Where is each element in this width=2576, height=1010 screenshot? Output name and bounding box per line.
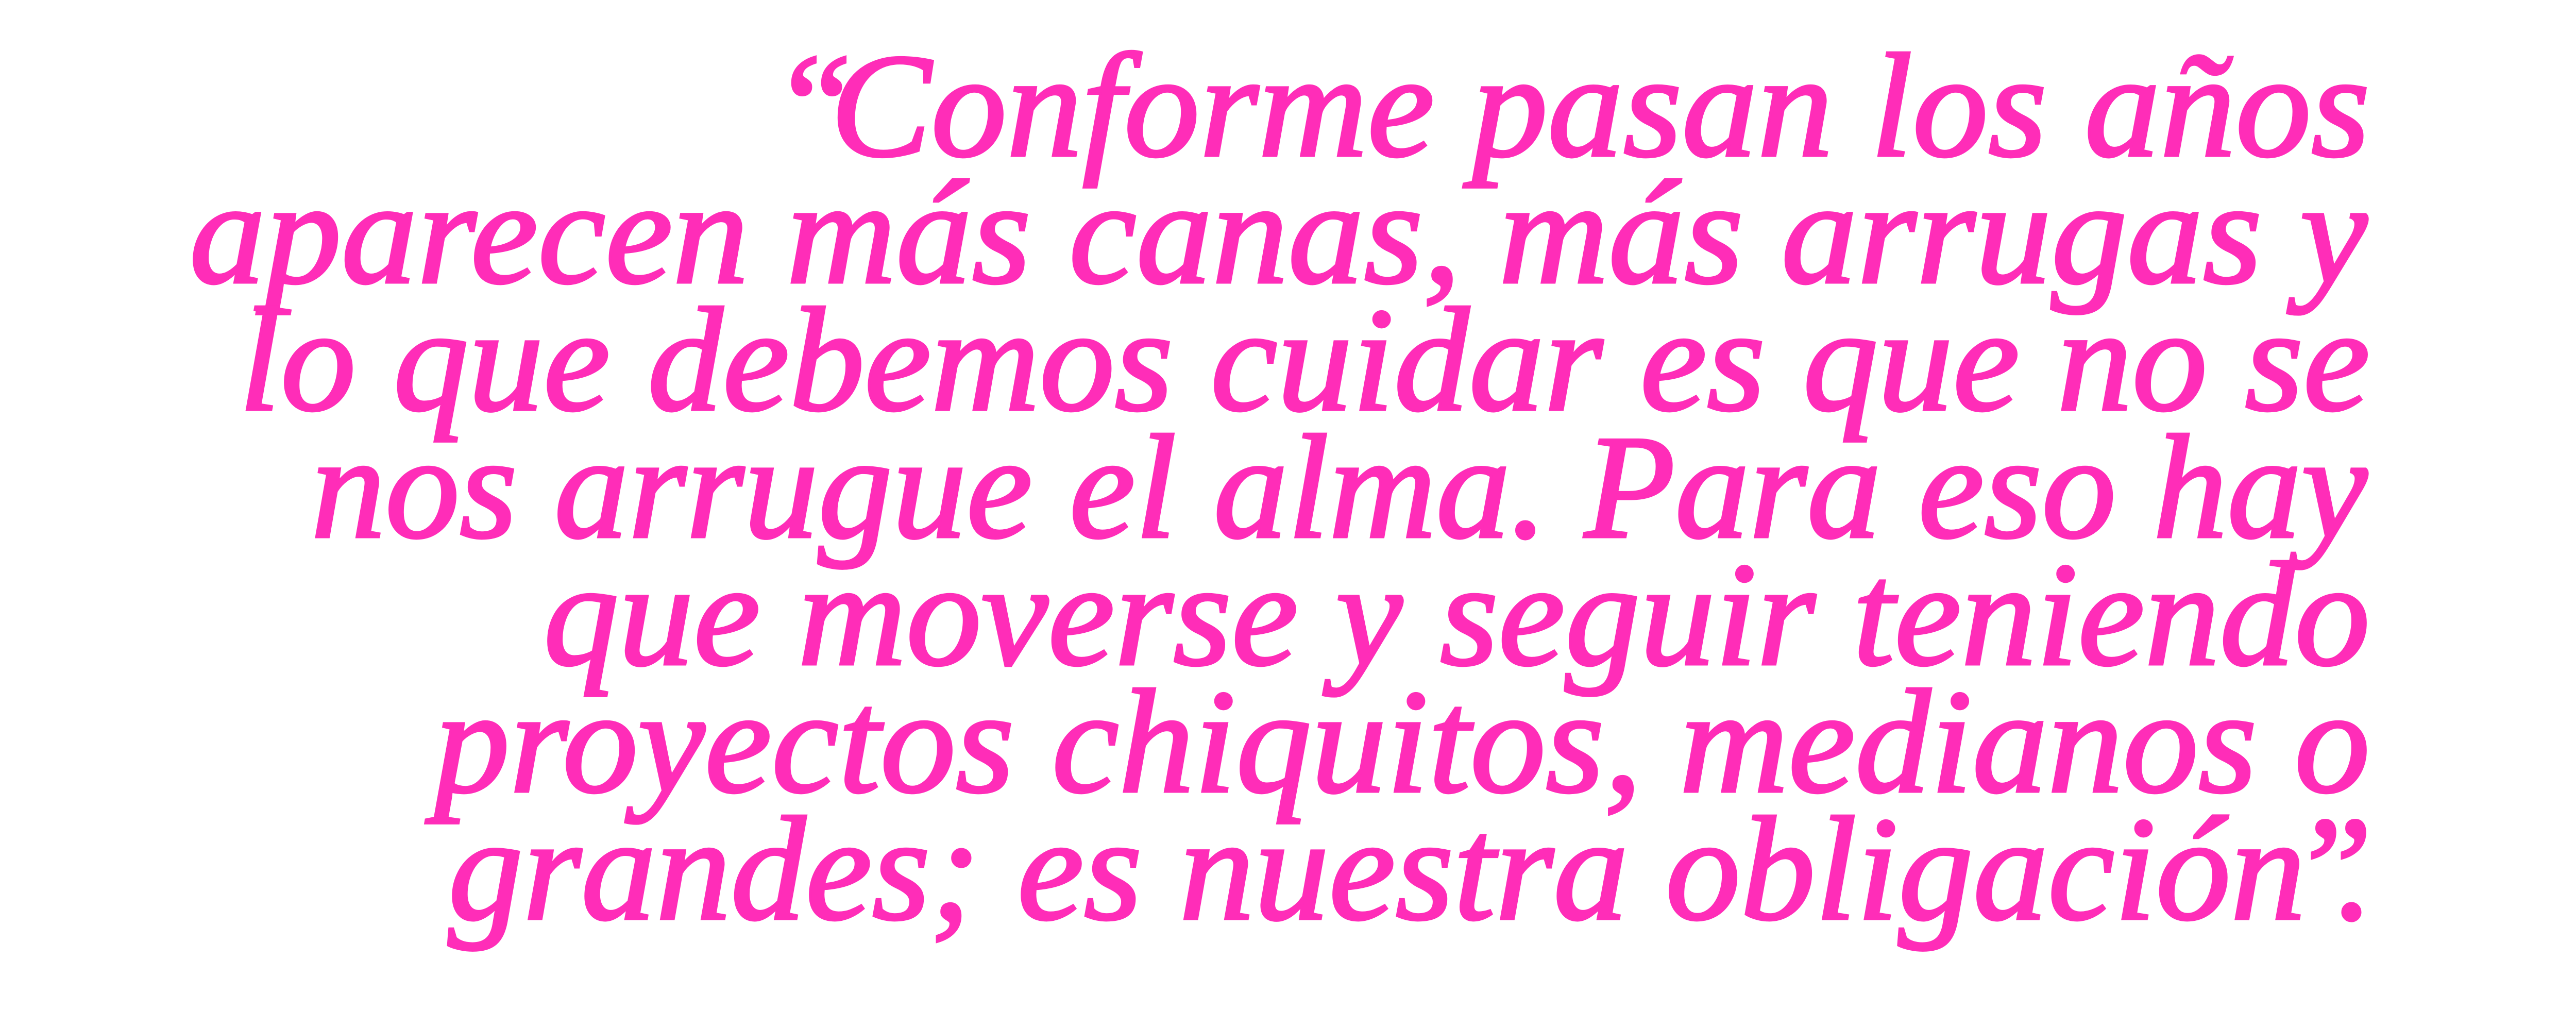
quote line 5: que moverse y seguir teniendo (544, 532, 2370, 697)
quote line 6: proyectos chiquitos, medianos o (425, 660, 2370, 824)
quote text block (190, 24, 2374, 951)
quote line 7: grandes; es nuestra obligación (448, 787, 2306, 951)
quote line 1: “ (771, 24, 853, 188)
quote line 7: ” (2290, 787, 2372, 951)
quote line 2: aparecen más canas, más arrugas y (190, 150, 2369, 315)
quote line 7: . (2336, 787, 2374, 951)
quote line 1: Conforme pasan los años (831, 24, 2370, 188)
quote line 3: lo que debemos cuidar es que no se (239, 278, 2370, 442)
quote line 4: nos arrugue el alma. Para eso hay (311, 405, 2369, 569)
